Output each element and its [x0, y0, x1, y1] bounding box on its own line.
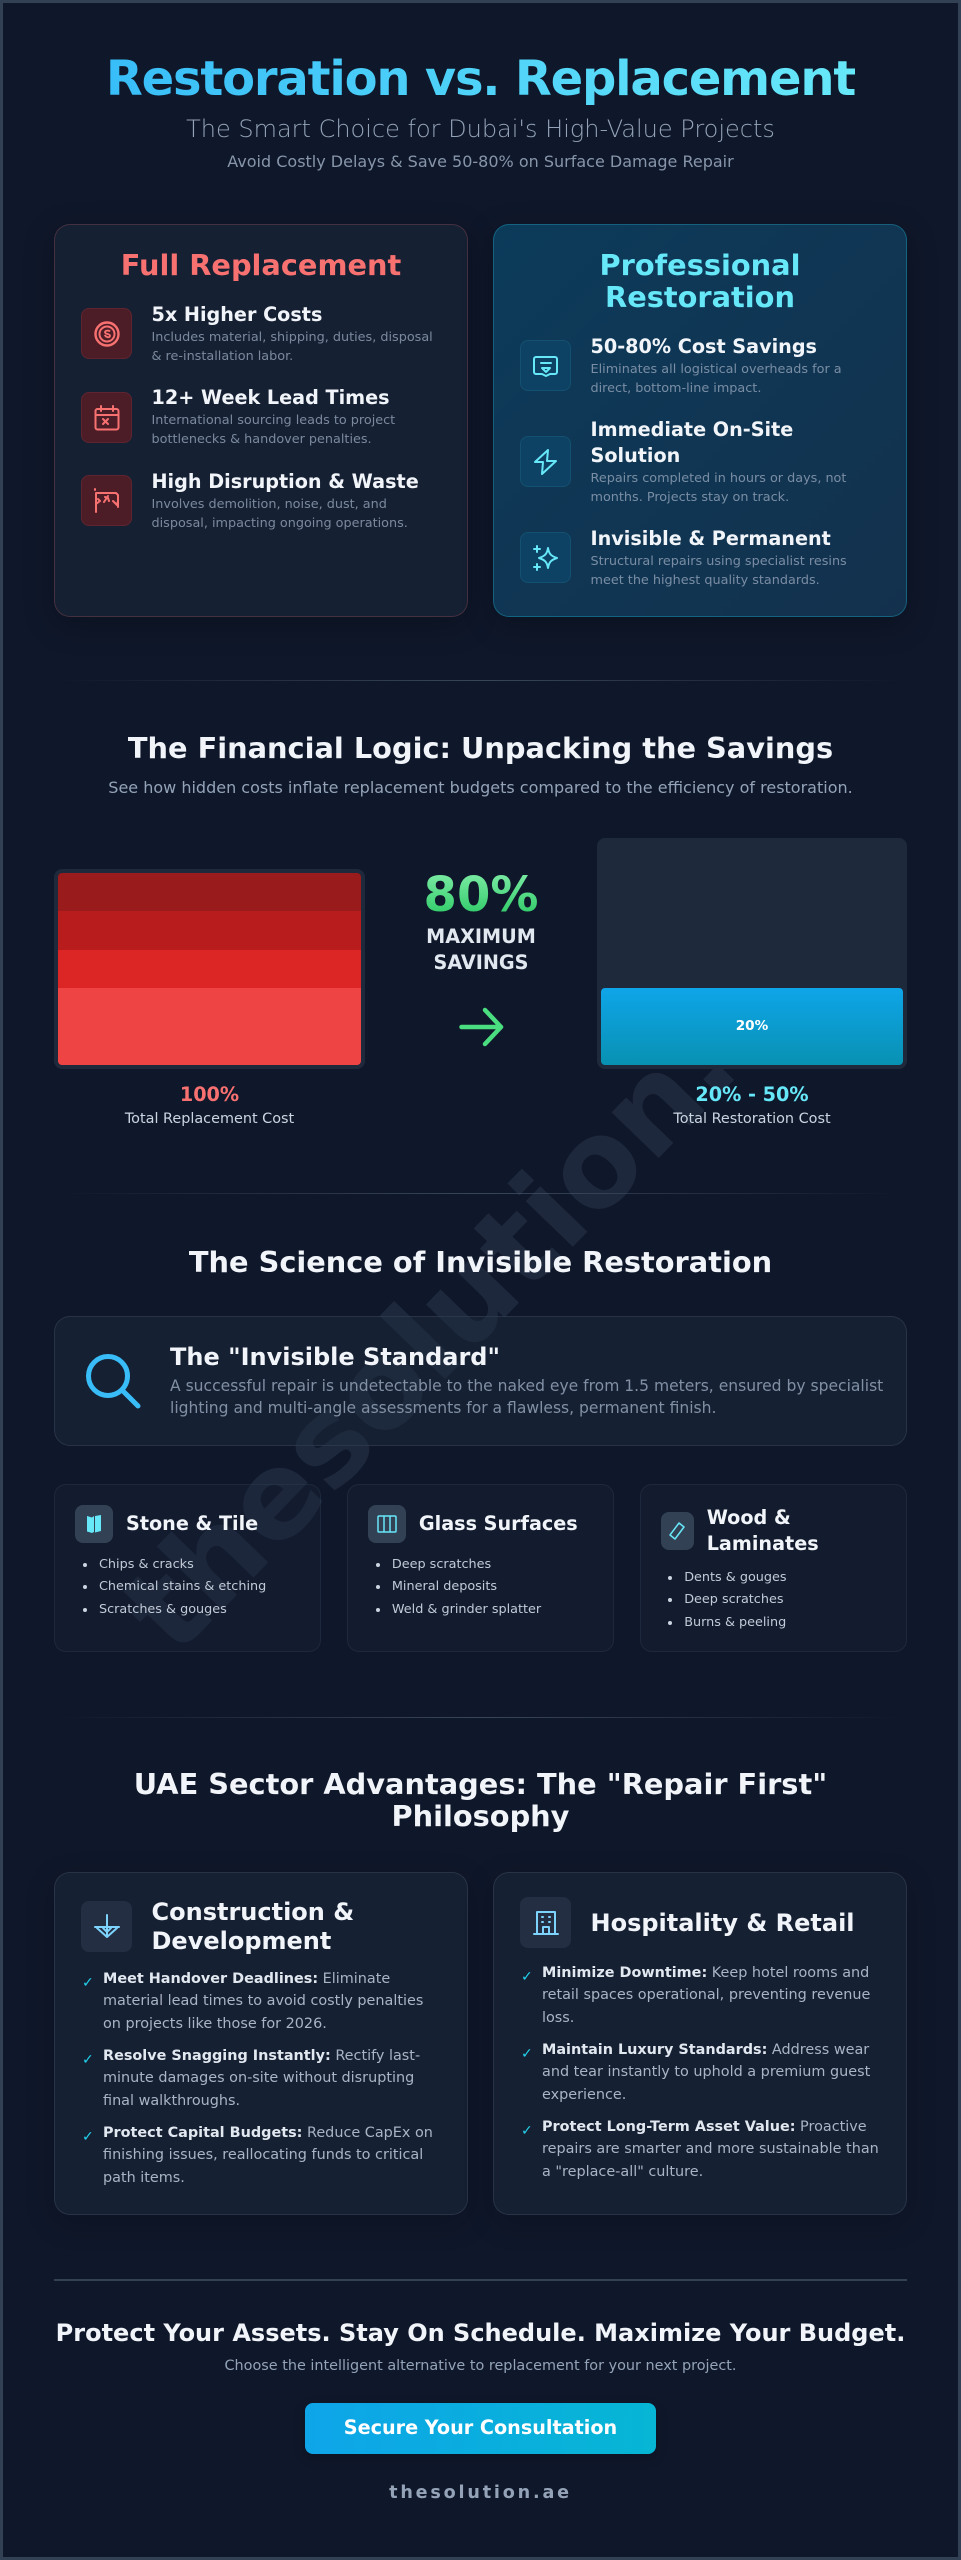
description: Structural repairs using specialist resins — [590, 554, 847, 569]
list: Chips & cracks — [99, 1557, 194, 1572]
item: disruption: High Disruption & Waste — [152, 470, 419, 493]
heading: sector advantages: Philosophy — [392, 1799, 569, 1833]
heading: invisible standard: The "Invisible Standard" — [170, 1343, 500, 1371]
list: construction benefits — [82, 1971, 433, 2186]
icon: costs — [81, 308, 132, 359]
benefit: handover deadlines: ✓ — [82, 1975, 94, 1991]
icon: glass — [368, 1505, 406, 1543]
watermark: thesolution.ae — [96, 878, 876, 1679]
benefit: asset value: repairs are smarter and more sustainable than — [542, 2141, 879, 2157]
benefit: luxury standards: Maintain Luxury Standards: Address wear — [542, 2042, 869, 2058]
benefit: luxury standards: experience. — [542, 2087, 626, 2103]
chart: replacement cost stacked bar — [54, 869, 365, 1069]
benefit: capital budgets: ✓ — [82, 2129, 94, 2145]
heading: professional restoration: Professional — [600, 248, 800, 282]
button: consultation — [305, 2403, 656, 2454]
description: Includes material, shipping, duties, disposal — [152, 330, 433, 345]
item: higher costs — [152, 303, 433, 364]
list: Dents & gouges — [684, 1570, 787, 1585]
list: Chemical stains & etching — [99, 1579, 266, 1594]
panel: construction and development — [54, 1872, 468, 2215]
panel: invisible standard — [54, 1316, 907, 1446]
description — [590, 554, 847, 588]
benefit: snagging: ✓ — [82, 2052, 94, 2068]
icon: sparkles — [520, 532, 571, 583]
icon: calendar — [81, 392, 132, 443]
icon: wood — [661, 1512, 694, 1550]
description: months. Projects stay on track. — [590, 490, 789, 505]
benefit: snagging: Resolve Snagging Instantly: Rectify last- — [103, 2048, 420, 2064]
benefit: capital budgets — [82, 2125, 433, 2186]
benefit: asset value: a "replace-all" culture. — [542, 2164, 703, 2180]
description — [590, 471, 846, 505]
icon: building — [520, 1897, 571, 1948]
benefit: snagging: minute damages on-site without disrupting — [103, 2070, 414, 2086]
description — [152, 413, 395, 447]
description: bottlenecks & handover penalties. — [152, 432, 372, 447]
item: lead times: 12+ Week Lead Times — [152, 386, 390, 409]
description: Repairs completed in hours or days, not — [590, 471, 846, 486]
description: direct, bottom-line impact. — [590, 381, 761, 396]
benefit: luxury standards — [521, 2042, 870, 2103]
item: disruption — [152, 470, 419, 531]
panel: glass surfaces — [347, 1484, 614, 1652]
heading: professional restoration — [600, 248, 800, 314]
heading: hospitality: Hospitality & Retail — [590, 1909, 855, 1937]
bar: 20% — [601, 988, 903, 1065]
benefit: downtime: retail spaces operational, preventing revenue — [542, 1987, 870, 2003]
chart: restoration cost bar — [597, 838, 907, 1069]
heading: glass surfaces: Glass Surfaces — [419, 1512, 578, 1535]
benefit: asset value: ✓ — [521, 2123, 533, 2139]
panel: stone and tile — [54, 1484, 321, 1652]
heading: full replacement: Full Replacement — [121, 248, 401, 282]
list: Mineral deposits — [392, 1579, 497, 1594]
item: on-site solution: Solution — [590, 444, 680, 467]
tagline: Avoid Costly Delays & Save 50-80% on Surface Damage Repair — [227, 152, 734, 171]
benefit: handover deadlines: Meet Handover Deadlines: Eliminate — [103, 1971, 390, 1987]
label: 20% - 50%: 20% - 50% — [695, 1083, 809, 1106]
heading: financial logic: The Financial Logic: Unpacking the Savings — [128, 731, 833, 765]
list — [376, 1557, 542, 1617]
benefit: handover deadlines: on projects like those for 2026. — [103, 2016, 327, 2032]
label: total restoration cost: Total Restoration Cost — [673, 1111, 831, 1127]
list: Deep scratches — [684, 1592, 784, 1607]
description — [152, 497, 408, 531]
description: & re-installation labor. — [152, 349, 293, 364]
stat label: maximum savings: MAXIMUM — [426, 925, 536, 948]
header — [106, 51, 855, 171]
item: on-site solution: Immediate On-Site — [590, 418, 793, 441]
icon: savings — [520, 340, 571, 391]
description — [170, 1377, 883, 1417]
heading: construction: Construction & — [152, 1898, 354, 1926]
icon: disruption — [81, 475, 132, 526]
description: Eliminates all logistical overheads for a — [590, 362, 842, 377]
heading: sector advantages — [134, 1767, 827, 1833]
description: Involves demolition, noise, dust, and — [152, 497, 387, 512]
icon: tile — [75, 1505, 113, 1543]
benefit: snagging — [82, 2048, 420, 2109]
description: International sourcing leads to project — [152, 413, 395, 428]
benefit: luxury standards: and tear instantly to uphold a premium guest — [542, 2064, 870, 2080]
item: invisible and permanent: Invisible & Permanent — [590, 527, 831, 550]
item: invisible and permanent — [590, 527, 847, 588]
description: A successful repair is undetectable to the naked eye from 1.5 meters, ensured by specialist — [170, 1377, 883, 1395]
benefit: capital budgets: Protect Capital Budgets: Reduce CapEx on — [103, 2125, 433, 2141]
item: cost savings — [590, 335, 842, 396]
item: lead times — [152, 386, 395, 447]
benefit: capital budgets: finishing issues, reallocating funds to critical — [103, 2147, 423, 2163]
description — [590, 362, 842, 396]
website: thesolution.ae — [389, 2483, 572, 2503]
item: higher costs: 5x Higher Costs — [152, 303, 322, 326]
description: disposal, impacting ongoing operations. — [152, 516, 408, 531]
benefit: capital budgets: path items. — [103, 2170, 185, 2186]
label: total replacement cost: Total Replacement Cost — [125, 1111, 294, 1127]
benefit: handover deadlines — [82, 1971, 423, 2032]
list: Weld & grinder splatter — [392, 1602, 541, 1617]
benefit: asset value: Protect Long-Term Asset Value: Proactive — [542, 2119, 867, 2135]
benefit: luxury standards: ✓ — [521, 2046, 533, 2062]
title: Restoration vs. Replacement — [106, 51, 855, 107]
subtitle: The Smart Choice for Dubai's High-Value Projects — [186, 115, 775, 143]
description: lighting and multi-angle assessments for a flawless, permanent finish. — [170, 1399, 716, 1417]
button: consultation: Secure Your Consultation — [344, 2416, 617, 2439]
panel: professional restoration — [493, 224, 907, 617]
benefit: downtime: loss. — [542, 2010, 574, 2026]
heading: science: The Science of Invisible Restoration — [189, 1244, 772, 1278]
panel: wood and laminates — [640, 1484, 907, 1652]
list: Scratches & gouges — [99, 1602, 227, 1617]
icon: magnifier — [86, 1354, 140, 1408]
footer heading: Protect Your Assets. Stay On Schedule. Maximize Your Budget. — [56, 2319, 905, 2347]
item: cost savings: 50-80% Cost Savings — [590, 335, 817, 358]
stat label: maximum savings — [426, 925, 536, 974]
benefit: downtime: Minimize Downtime: Keep hotel rooms and — [542, 1965, 869, 1981]
description: meet the highest quality standards. — [590, 573, 820, 588]
list — [668, 1570, 787, 1630]
description — [152, 330, 433, 364]
stat label: maximum savings: SAVINGS — [434, 951, 528, 974]
heading: sector advantages: UAE Sector Advantages: The "Repair First" — [134, 1767, 827, 1801]
benefit: snagging: final walkthroughs. — [103, 2093, 240, 2109]
panel: hospitality and retail — [493, 1872, 907, 2215]
list: Deep scratches — [392, 1557, 491, 1572]
heading: construction — [152, 1898, 354, 1955]
item: on-site solution — [590, 418, 846, 505]
subheading: financial logic: See how hidden costs inflate replacement budgets compared to the efficiency of restoration. — [108, 778, 853, 797]
panel: full replacement — [54, 224, 468, 617]
list — [83, 1557, 266, 1617]
heading: wood and laminates — [707, 1506, 819, 1555]
heading: construction: Development — [152, 1927, 331, 1955]
list: hospitality benefits — [521, 1965, 879, 2180]
icon: construction — [81, 1901, 132, 1952]
heading: wood and laminates: Laminates — [707, 1532, 819, 1555]
footer subheading: Choose the intelligent alternative to replacement for your next project. — [224, 2358, 736, 2374]
heading: stone and tile: Stone & Tile — [126, 1512, 258, 1535]
stat: 80%: 80% — [424, 867, 538, 923]
list: Burns & peeling — [684, 1615, 786, 1630]
label: 100%: 100% — [180, 1083, 239, 1106]
benefit: asset value — [521, 2119, 879, 2180]
benefit: handover deadlines: material lead times to avoid costly penalties — [103, 1993, 423, 2009]
benefit: downtime — [521, 1965, 870, 2026]
bar: 20%: 20% — [736, 1018, 768, 1034]
heading: wood and laminates: Wood & — [707, 1506, 791, 1529]
heading: professional restoration: Restoration — [605, 280, 795, 314]
footer divider — [54, 2279, 907, 2281]
arrow — [459, 1008, 504, 1046]
benefit: downtime: ✓ — [521, 1969, 533, 1985]
icon: lightning — [520, 436, 571, 487]
